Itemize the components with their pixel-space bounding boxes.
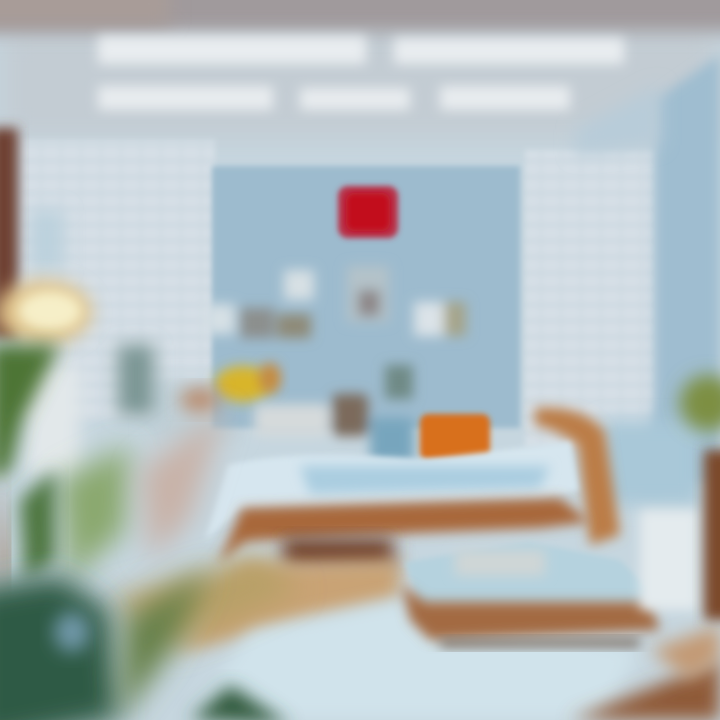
icon: foreground plant	[0, 345, 300, 720]
bench	[402, 542, 660, 648]
panel: right blue wall	[640, 55, 720, 490]
heading: first title line (illegibly blurred in the reference)	[98, 36, 624, 64]
floor	[180, 560, 720, 720]
icon: lamp	[0, 280, 92, 344]
panel: lower right wall	[600, 420, 700, 505]
icon: red wall square	[338, 186, 398, 238]
bed frame	[218, 498, 590, 565]
left window	[25, 210, 154, 475]
icon: right plant	[680, 375, 720, 431]
yellow cushion	[180, 363, 281, 412]
right side table	[640, 450, 720, 620]
heading: second title line (illegibly blurred in the reference)	[98, 86, 570, 110]
headboard	[535, 408, 620, 545]
orange pillow	[420, 414, 490, 460]
bed mattress	[205, 442, 578, 540]
under-bed shadow	[282, 538, 394, 568]
left dark post	[0, 128, 18, 338]
pillows	[254, 365, 414, 462]
shelf objects	[205, 266, 466, 338]
panel: centre blue wall	[212, 166, 520, 428]
